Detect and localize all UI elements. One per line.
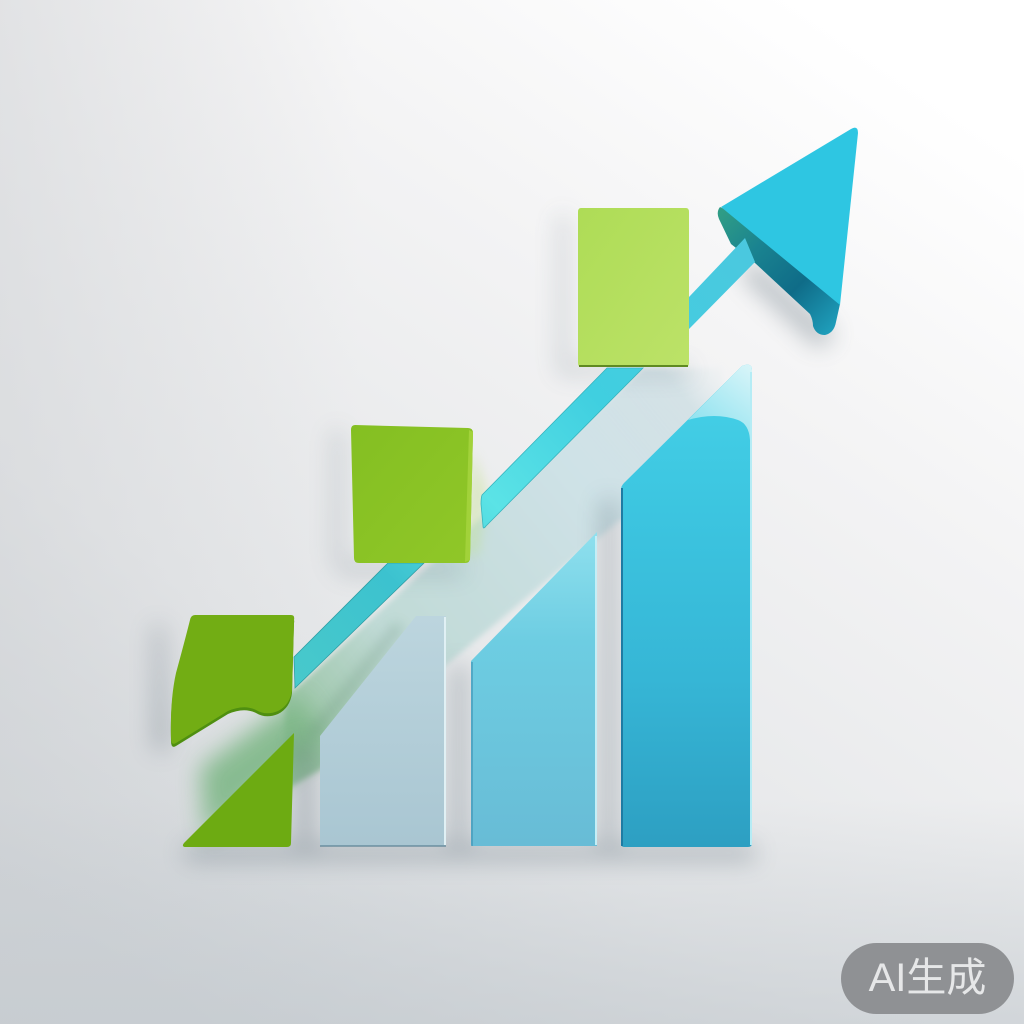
- green flag shape: lower: [171, 615, 294, 747]
- arrow shaft ribbon: [294, 238, 755, 688]
- badge: AI generated: [841, 943, 1014, 1014]
- diagonal shadow above pale bar: [312, 625, 400, 735]
- soft glow band below the arrow line: [285, 368, 735, 790]
- ground shadows: [154, 215, 835, 860]
- bar 3: tall blue: [621, 365, 752, 847]
- badge: AI generated: AI生成: [869, 956, 986, 1000]
- green glow at lower left of the band: [200, 695, 325, 838]
- green square: top: [578, 208, 689, 367]
- arrow head: [718, 128, 858, 335]
- green square: middle: [351, 425, 473, 563]
- green triangle base: [183, 733, 294, 847]
- green glow beside the middle square: [466, 450, 486, 555]
- bar 2: medium blue: [471, 532, 597, 846]
- bar 1: pale blue: [320, 616, 446, 846]
